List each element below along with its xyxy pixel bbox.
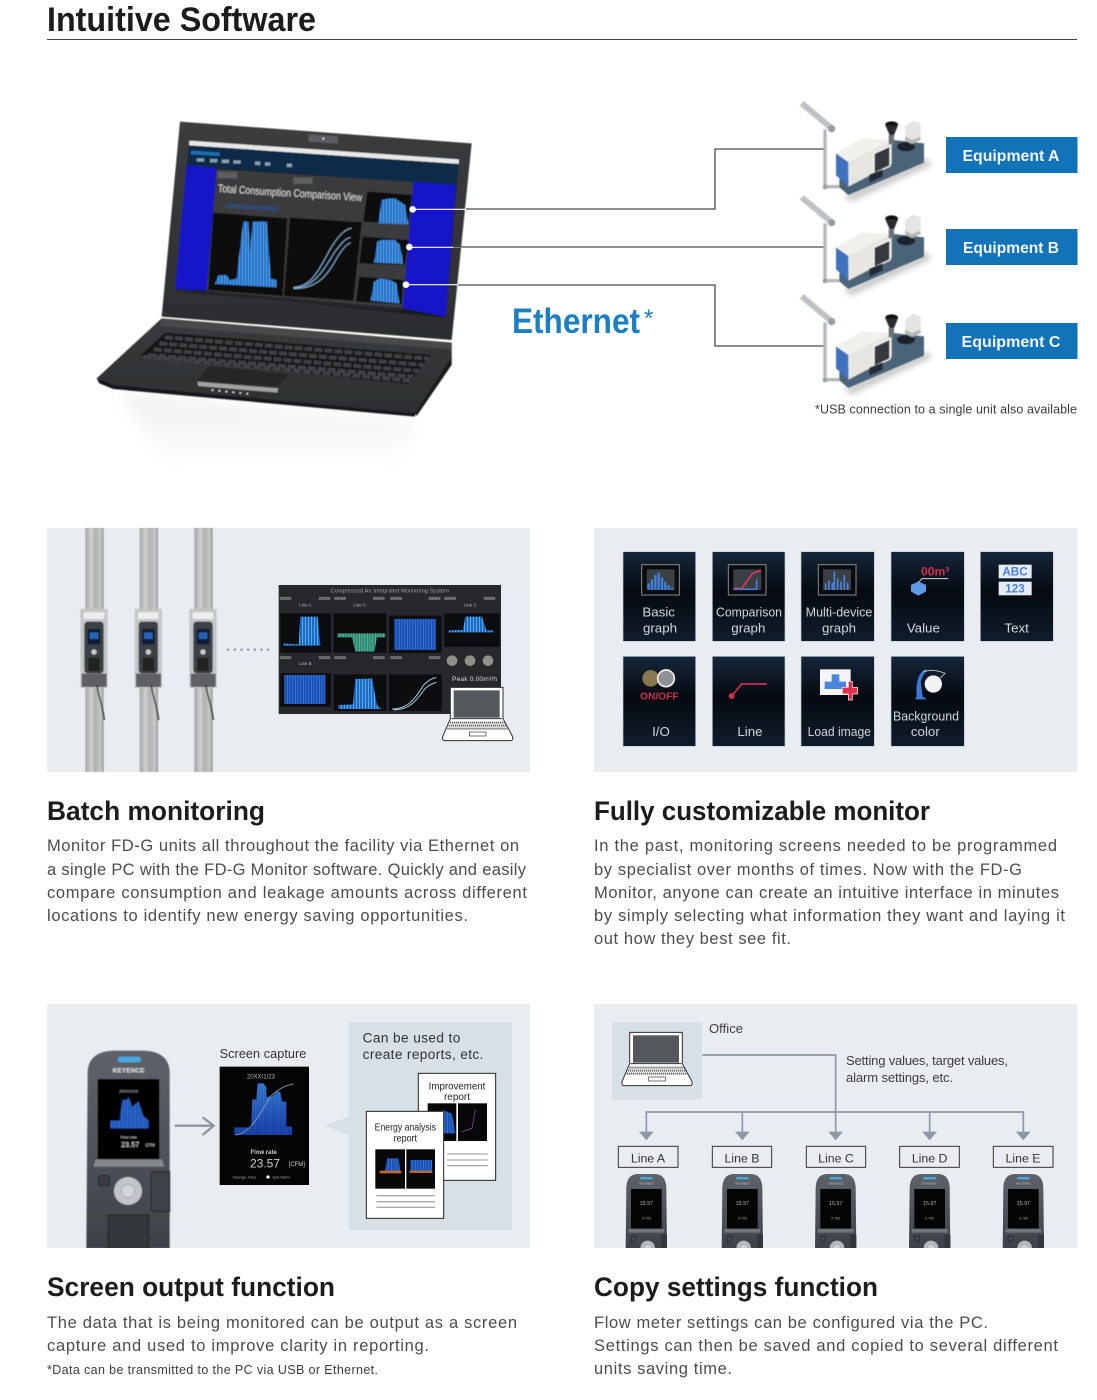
tile: line: Line	[737, 724, 763, 739]
text: copy settings description: units saving time.	[594, 1360, 732, 1378]
heading: screen output function: Screen output function	[47, 1272, 335, 1302]
energy analysis report: Energy analysis	[375, 1122, 436, 1133]
dashboard screen: Compressed Air Integrated Monitoring System	[330, 589, 449, 595]
tile: multi-device graph	[801, 552, 874, 641]
tile: load image	[801, 656, 874, 746]
dashboard screen: Line C	[464, 602, 477, 607]
line B	[712, 1146, 772, 1255]
tile: I/O: I/O	[652, 724, 670, 739]
text: batch monitoring description: Monitor FD-G units all throughout the facility via Ethernet on	[47, 837, 519, 855]
screen capture: [CFM]	[289, 1162, 305, 1168]
tile: basic graph	[623, 552, 696, 641]
equipment A label	[946, 137, 1078, 173]
tile: comparison graph: Comparison	[716, 605, 782, 620]
pipes and flow meters	[80, 528, 217, 772]
screen capture: 20XX/1/23	[247, 1075, 276, 1081]
text: fully customizable description: Monitor, anyone can create an intuitive interface in minutes	[594, 884, 1059, 902]
callout: report usage: create reports, etc.	[363, 1047, 483, 1062]
text: batch monitoring description	[47, 837, 527, 925]
tile: text: Text	[1004, 620, 1029, 635]
callout: report usage: Can be used to	[363, 1031, 461, 1046]
line A	[618, 1146, 678, 1255]
tile: line	[712, 656, 785, 746]
settings note: Setting values, target values,	[846, 1053, 1008, 1068]
equipment C label	[946, 323, 1078, 359]
tile: background color: color	[911, 724, 940, 739]
tile: I/O: ON/OFF	[640, 691, 679, 702]
device photo: Flow rate	[120, 1135, 138, 1140]
tile: I/O	[623, 656, 696, 746]
text: copy settings description	[594, 1314, 1058, 1378]
line D: Line D	[912, 1152, 948, 1166]
text: screen output description	[47, 1314, 517, 1355]
tile: comparison graph	[712, 552, 785, 641]
panel: fully customizable monitor	[594, 528, 1077, 772]
equipment B machine	[802, 197, 932, 296]
icon: laptop	[443, 687, 513, 741]
line C	[806, 1146, 866, 1255]
dashboard screen: Peak 0.00m³/h	[452, 676, 497, 683]
energy analysis report: report	[394, 1133, 417, 1144]
tile: background color	[891, 656, 964, 746]
laptop lid	[162, 122, 472, 340]
office label: Office	[709, 1021, 743, 1036]
heading: batch monitoring: Batch monitoring	[47, 796, 265, 826]
office laptop	[612, 1022, 702, 1099]
screen connection dots	[403, 206, 470, 288]
line D	[900, 1146, 959, 1255]
screen capture: Screen capture	[220, 1047, 306, 1061]
title: Intuitive Software	[47, 1, 316, 39]
tile: text	[980, 552, 1053, 641]
equipment C label: Equipment C	[962, 334, 1060, 351]
equipment A machine	[802, 103, 932, 202]
screen capture	[220, 1047, 309, 1185]
device photo: 20XX/1/23	[119, 1088, 139, 1093]
text: fully customizable description: out how they best see fit.	[594, 930, 791, 948]
equipment B label	[946, 229, 1078, 265]
laptop screen: Total Consumption	[217, 183, 291, 200]
text: fully customizable description	[594, 837, 1065, 948]
laptop with monitoring software	[97, 122, 472, 467]
line C: Line C	[818, 1152, 854, 1166]
device photo: KEYENCE	[113, 1068, 145, 1075]
dashboard screen	[279, 585, 501, 714]
text: batch monitoring description: compare consumption and leakage amounts across different	[47, 884, 527, 902]
energy analysis report	[366, 1111, 444, 1218]
dashboard screen: Line B	[299, 661, 312, 666]
text: fully customizable description: by specialist over months of times. Now with the FD-G	[594, 861, 1022, 879]
tile: basic graph: Basic	[642, 605, 675, 620]
screen capture: Flow rate	[251, 1150, 277, 1156]
settings note: alarm settings, etc.	[846, 1070, 953, 1085]
dotted connection	[227, 648, 270, 651]
heading: fully customizable monitor: Fully customizable monitor	[594, 796, 930, 826]
footnote: data transmission: *Data can be transmitted to the PC via USB or Ethernet.	[47, 1363, 378, 1377]
equipment C machine	[802, 296, 932, 395]
text: fully customizable description: by simply selecting what information they want and laying it	[594, 907, 1065, 925]
line E: Line E	[1006, 1152, 1040, 1166]
ethernet label: Ethernet	[512, 302, 640, 341]
usb footnote: *USB connection to a single unit also available	[815, 402, 1077, 416]
line B: Line B	[725, 1152, 759, 1166]
line E	[993, 1146, 1053, 1255]
arrow	[175, 1117, 214, 1135]
distribution arrows	[639, 1055, 1031, 1140]
device photo: 23.57	[121, 1140, 139, 1149]
tile: value: 00m³	[921, 564, 949, 578]
tile: value	[891, 552, 964, 641]
text: fully customizable description: In the past, monitoring screens needed to be programmed	[594, 837, 1057, 855]
panel: copy settings function	[594, 1004, 1077, 1255]
text: copy settings description: Flow meter settings can be configured via the PC.	[594, 1314, 988, 1332]
text: batch monitoring description: a single PC with the FD-G Monitor software. Quickly and easily	[47, 861, 527, 879]
improvement report: report	[444, 1092, 470, 1103]
tile: value: Value	[907, 620, 940, 635]
text: screen output description: capture and used to improve clarity in reporting.	[47, 1337, 429, 1355]
screen capture: Change Zone	[232, 1174, 257, 1179]
device photo	[86, 1051, 170, 1248]
dashboard screen: Line A	[299, 602, 311, 607]
tile: text: 123	[1005, 583, 1025, 596]
tile: text: ABC	[1002, 566, 1028, 579]
screen capture: 23.57	[250, 1157, 280, 1171]
laptop screen	[175, 141, 459, 318]
equipment A label: Equipment A	[962, 148, 1060, 165]
tile: multi-device graph: graph	[822, 620, 856, 635]
tile: load image: Load image	[808, 724, 871, 739]
tile: basic graph: graph	[643, 620, 677, 635]
improvement report	[418, 1073, 496, 1180]
settings note	[846, 1053, 1008, 1085]
equipment B label: Equipment B	[963, 240, 1059, 257]
tile: multi-device graph: Multi-device	[806, 605, 872, 620]
callout: report usage	[324, 1022, 512, 1230]
text: copy settings description: Settings can then be saved and copied to several different	[594, 1337, 1058, 1355]
text: screen output description: The data that is being monitored can be output as a screen	[47, 1314, 517, 1332]
text: batch monitoring description: locations to identify new energy saving opportunities.	[47, 907, 468, 925]
panel: batch monitoring	[47, 528, 530, 772]
heading: copy settings function: Copy settings function	[594, 1272, 878, 1302]
laptop base	[97, 318, 452, 417]
tile: background color: Background	[893, 709, 959, 724]
improvement report: Improvement	[429, 1081, 485, 1092]
device photo: CFM	[145, 1142, 155, 1147]
panel: screen output function	[47, 1004, 530, 1248]
line A: Line A	[631, 1152, 666, 1166]
ethernet connection lines	[453, 149, 826, 346]
screen capture: Sub Menu	[272, 1174, 291, 1179]
tile: comparison graph: graph	[731, 620, 765, 635]
dashboard screen: Line C	[353, 602, 366, 607]
laptop screen: Comparison View	[293, 188, 362, 204]
ethernet label: *	[644, 305, 653, 332]
